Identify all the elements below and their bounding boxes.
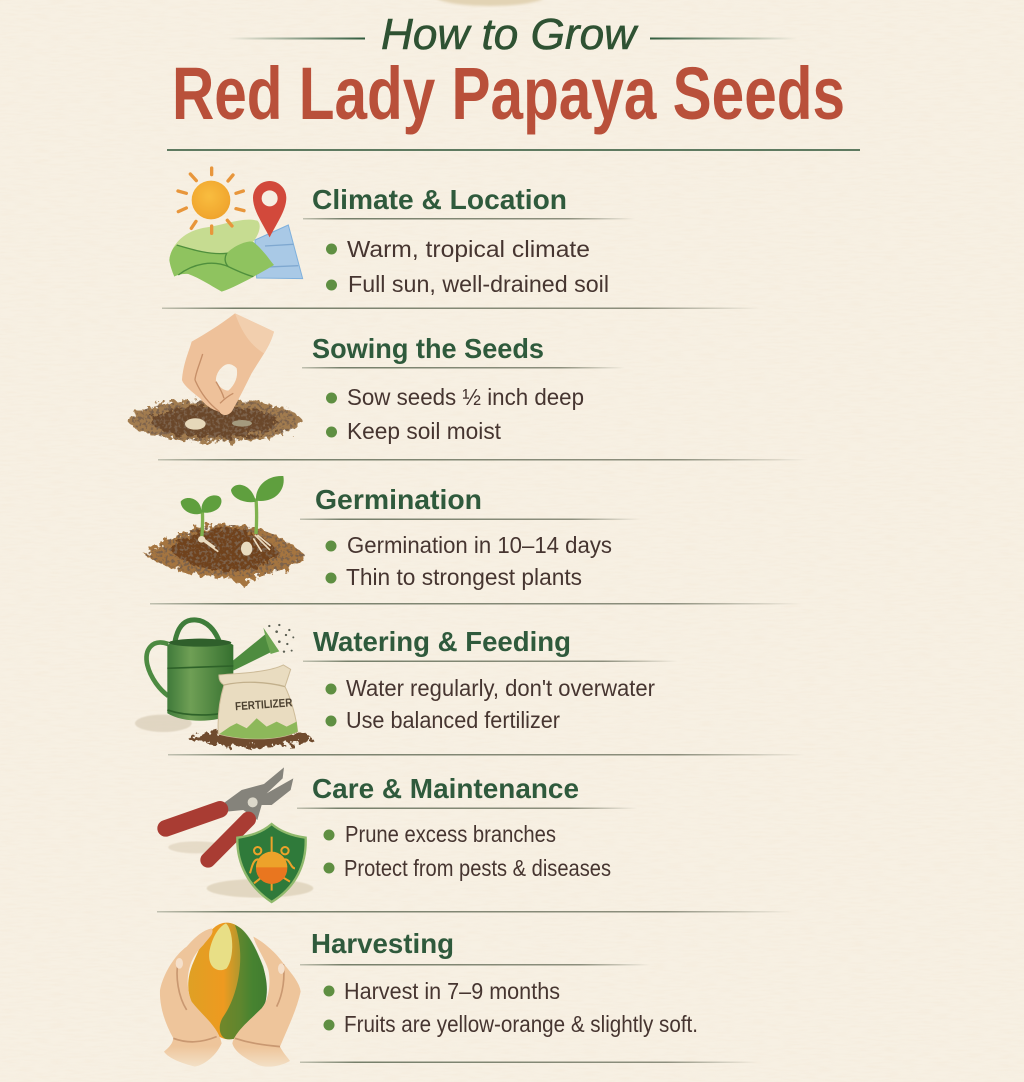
panel: harvesting: [160, 923, 698, 1067]
bullet list: Full sun, well-drained soil: [348, 271, 609, 297]
icon: pruning shears and pest shield: [166, 767, 313, 902]
bullet list: Prune excess branches: [345, 821, 556, 847]
bullet list: [326, 532, 612, 590]
bullet list: [324, 821, 611, 881]
icon: watering can and fertilizer bag: [135, 620, 312, 746]
label: fertilizer: FERTILIZER: [235, 696, 293, 713]
bullet list: Thin to strongest plants: [346, 564, 582, 590]
heading: Watering & Feeding: Watering & Feeding: [313, 626, 571, 657]
panel: watering and feeding: [135, 620, 678, 746]
heading: Care & Maintenance: Care & Maintenance: [312, 773, 579, 804]
bullet list: [326, 675, 655, 733]
bullet list: Use balanced fertilizer: [346, 707, 560, 733]
bullet list: [326, 236, 609, 297]
subtitle: How to Grow: How to Grow: [381, 10, 639, 59]
bullet list: [324, 978, 698, 1037]
heading: Germination: Germination: [315, 484, 482, 515]
main title: Red Lady Papaya Seeds: Red Lady Papaya Seeds: [172, 52, 845, 135]
bullet list: Sow seeds ½ inch deep: [347, 384, 584, 410]
bullet list: Protect from pests & diseases: [344, 855, 611, 881]
bullet list: [326, 384, 584, 444]
panel: climate and location: [169, 168, 635, 297]
icon: hand placing seeds in soil: [129, 313, 301, 441]
title block: [167, 10, 860, 151]
panel: care and maintenance: [166, 767, 637, 902]
heading: Harvesting: Harvesting: [311, 928, 454, 959]
bullet list: Water regularly, don't overwater: [346, 675, 655, 701]
heading: Sowing the Seeds: Sowing the Seeds: [312, 333, 544, 364]
bullet list: Fruits are yellow-orange & slightly soft.: [344, 1011, 698, 1037]
icon: hands holding a ripe papaya: [160, 923, 301, 1067]
bullet list: Keep soil moist: [347, 418, 501, 444]
icon: sun, landscape and map pin: [169, 168, 303, 292]
bullet list: Harvest in 7–9 months: [344, 978, 560, 1004]
icon: seedlings sprouting from soil: [145, 476, 305, 584]
bullet list: Warm, tropical climate: [347, 236, 590, 262]
panel: germination: [145, 476, 640, 590]
bullet list: Germination in 10–14 days: [347, 532, 612, 558]
panel: sowing the seeds: [129, 313, 625, 444]
heading: Climate & Location: Climate & Location: [312, 184, 567, 215]
